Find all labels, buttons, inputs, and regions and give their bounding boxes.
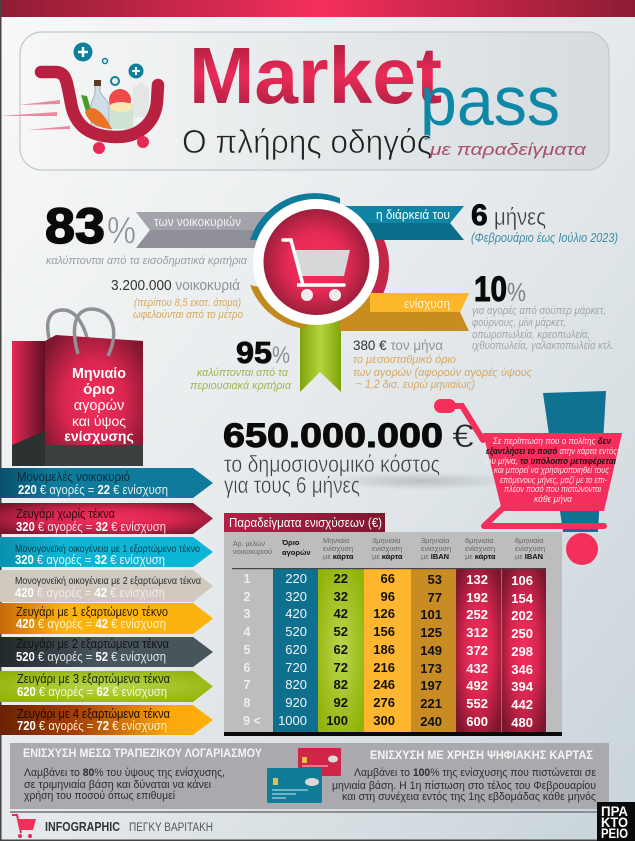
table header: ενίσχυση [465,544,495,553]
arrow: couple with 1 child: Ζευγάρι με 1 εξαρτώμενο τέκνο [16,605,168,619]
table header: 3μηνιαία [372,536,401,545]
table header: ενίσχυση [515,544,545,553]
column: 3-month card: 156 [373,624,395,639]
arrow: couple without children [0,503,213,534]
column: 6-month IBAN [511,573,534,730]
table header: ενίσχυση [323,544,353,553]
footer credit [12,815,213,838]
banner: grey households: των νοικοκυριών [154,215,241,229]
table header: ενίσχυση [372,544,402,553]
arrow: couple without children: 320 € αγορές = 32 € ενίσχυση [16,520,166,534]
arrow: single parent with 2 children: Μονογονεϊκή οικογένεια με 2 εξαρτώμενα τέκνα [15,575,201,587]
table header: ενίσχυση [421,544,451,553]
arrow: couple with 1 child: 420 € αγορές = 42 € ενίσχυση [16,617,166,631]
column: members: 5 [244,643,251,657]
stat: households benefiting: (περίπου 8,5 εκατ. άτομα) [134,297,241,309]
column: 6-month card: 132 [466,572,488,587]
column: 3-month card: 186 [373,642,395,657]
icon: cart [283,240,350,301]
budget cost [223,417,515,498]
stat: 10 percent: ιχθυοπωλεία, γαλακτοπωλεία κτλ. [472,340,614,352]
arrow: couple with 3 children [0,671,213,702]
column: 3-month IBAN: 53 [428,572,442,587]
column: purchase limit: 320 [285,589,307,604]
column: 6-month card: 372 [466,643,488,658]
bag label: όριο [83,381,115,398]
subtitle: Ο πλήρης οδηγός [182,123,432,160]
household arrows [0,468,213,735]
column: purchase limit: 520 [285,624,307,639]
arrow: couple with 3 children: Ζευγάρι με 3 εξαρτώμενα τέκνα [17,672,170,686]
icon: bank cards [267,748,341,803]
column: 3-month IBAN: 240 [420,714,442,729]
stat: 6 months: μήνες [494,204,546,231]
bag label: και ύψος [72,413,126,429]
stat: 83 percent: 83 [45,198,105,254]
bag label: αγορών [74,398,124,414]
table header: Μηνιαία [323,536,350,545]
ribbon: green [300,318,341,392]
heading: pass: pass [420,62,560,140]
shopping bag [12,309,143,466]
table header: 3μηνιαία [421,536,450,545]
table title: Παραδείγματα ενισχύσεων (€) [229,515,382,530]
arrow: couple with 2 children: Ζευγάρι με 2 εξαρτώμενα τέκνα [16,637,169,651]
column: members: 1 [244,572,251,586]
logo: Praktoreio: ΚΤΟ [601,815,628,830]
arc: teal [250,193,340,240]
callout text: Σε περίπτωση που ο πολίτης δεν [492,436,611,446]
stat: 380 euros: των αγορών (αφορούν αγορές ύψους [353,367,532,379]
table header: με ΙΒΑΝ [421,552,449,561]
stat: 380 euros [353,337,532,391]
stat: 83 percent [45,198,285,267]
table header: Αρ. μελών [233,539,265,548]
arrow: single parent with 1 child: 320 € αγορές = 32 € ενίσχυση [15,553,165,567]
column: purchase limit: 220 [285,571,307,586]
column: 3-month IBAN: 197 [420,678,442,693]
column: purchase limit: 420 [285,606,307,621]
arrow: couple with 3 children: 620 € αγορές = 62 € ενίσχυση [17,685,167,699]
column: members: 6 [244,661,251,675]
arrow: couple with 4 children [0,705,213,735]
column: monthly card [326,571,348,728]
stat: households benefiting: 3.200.000 νοικοκυριά [111,278,240,294]
column: 6-month IBAN: 346 [511,662,533,677]
logo: Praktoreio [597,802,635,841]
stat: 83 percent: % [107,210,136,252]
budget cost: € [452,418,474,454]
stat: 10 percent: φούρνους, μίνι μάρκετ, [472,317,566,329]
column: monthly card: 100 [326,713,348,728]
column: members: 4 [244,625,251,639]
icon: shopping cart with groceries [0,42,158,154]
central circle emblem with ribbons [250,193,469,392]
column: 6-month card [466,572,488,729]
stat: 6 months [471,199,618,245]
column: 6-month IBAN: 202 [511,608,533,623]
budget cost: 650.000.000 [223,417,443,455]
callout text [484,436,618,504]
column: purchase limit: 920 [285,695,307,710]
column: 6-month IBAN: 250 [511,626,533,641]
arrow: couple with 1 child [0,603,213,634]
column: monthly card: 42 [334,606,348,621]
stat: 380 euros: ~ 1,2 δισ. ευρώ μηνιαίως) [356,379,475,391]
digital card text: Λαμβάνει το 100% της ενίσχυσης που πιστώνεται σε [354,767,596,779]
callout text: και μπορεί να χρησιμοποιηθεί τους [494,465,610,475]
column: 6-month IBAN: 154 [511,591,534,606]
bag label: ενίσχυσης [64,428,134,444]
column: 6-month IBAN: 298 [511,644,533,659]
title panel [0,31,609,170]
stat: 83 percent: καλύπτονται από τα εισοδηματικά κριτήρια [46,255,247,267]
digital card text [332,750,596,803]
arrow: single parent with 1 child: Μονογονεϊκή οικογένεια με 1 εξαρτώμενο τέκνο [15,543,200,555]
column: 3-month IBAN: 149 [420,643,442,658]
column: 3-month card: 96 [381,589,395,604]
arc: red right [340,240,389,296]
table header: νοικοκυριού [233,547,272,556]
digital card text: μηνιαία βάση. Η 1η πίστωση στο τέλος του Φεβρουαρίου [332,780,596,792]
bank transfer text [23,748,262,802]
arc: gold [250,285,320,329]
stat: 10 percent: % [507,277,526,307]
arrow: couple with 2 children: 520 € αγορές = 52 € ενίσχυση [16,650,166,664]
digital card text: και στη συνέχεια εντός της 1ης εβδομάδας κάθε μηνός [342,791,596,803]
column: monthly card: 72 [334,660,348,675]
column: purchase limit: 720 [285,660,307,675]
table header: αγορών [282,548,311,557]
column: 6-month card: 600 [466,714,488,729]
stat: 10 percent: οπωροπωλεία, κρεοπωλεία, [472,329,590,341]
digital card text: ΕΝΙΣΧΥΣΗ ΜΕ ΧΡΗΣΗ ΨΗΦΙΑΚΗΣ ΚΑΡΤΑΣ [370,750,593,762]
column: 3-month card: 276 [373,695,395,710]
bag label: Μηνιαίο [72,365,126,382]
bank transfer text: χρήση του ποσού όπως επιθυμεί [24,790,176,802]
footer credit: INFOGRAPHIC [45,819,121,834]
callout text: εξαντλήσει το ποσό στην κάρτα εντός [486,446,618,456]
exclamation mark [543,391,606,565]
subtitle accent: με παραδείγματα [429,140,588,159]
table: examples of support [224,513,562,736]
column: members [243,572,261,728]
column: 6-month card: 192 [466,590,488,605]
banner: gold support: ενίσχυση [404,297,450,311]
table header: με ΙΒΑΝ [515,552,543,561]
column: 6-month IBAN: 394 [511,679,534,694]
logo: Praktoreio: ΡΕΙΟ [601,826,628,841]
column: 6-month card: 312 [466,625,488,640]
arrow: couple with 4 children: 720 € αγορές = 72 € ενίσχυση [17,719,167,733]
stat: households benefiting [111,278,243,321]
stat: 95 percent: 95 [236,335,272,370]
callout text: του μήνα, το υπόλοιπο μεταφέρεται [484,456,616,466]
banner: gold support [340,293,469,331]
column: monthly card: 92 [334,695,348,710]
red cart callout [434,399,622,526]
banner: teal duration [340,206,464,240]
column: 3-month card: 300 [373,713,395,728]
column: monthly card: 52 [334,624,348,639]
table header: 6μηνιαία [465,536,494,545]
arrow: couple with 2 children [0,637,213,667]
top bar [0,0,635,17]
column: members: 2 [244,590,251,604]
stat: 10 percent: για αγορές από σούπερ μάρκετ, [472,305,606,317]
banner: grey households [136,212,285,248]
column: purchase limit: 620 [285,642,307,657]
column: 6-month card: 432 [466,661,488,676]
column: 3-month IBAN: 173 [420,661,442,676]
column: 3-month IBAN [420,572,442,729]
stat: 95 percent: % [272,342,290,369]
column: monthly card: 22 [334,571,348,586]
stat: 10 percent: 10 [474,270,507,309]
column: 6-month IBAN: 106 [511,573,533,588]
table header: με κάρτα [465,552,496,561]
arrow: single-member household: 220 € αγορές = 22 € ενίσχυση [18,483,168,497]
bank transfer text: Λαμβάνει το 80% του ύψους της ενίσχυσης, [24,767,225,779]
icon: footer cart [12,815,36,838]
stat: 6 months: 6 [471,199,488,232]
column: monthly card: 62 [334,642,348,657]
column: monthly card: 82 [334,677,348,692]
arrow: couple without children: Ζευγάρι χωρίς τέκνα [16,507,115,521]
bag label [64,365,134,444]
column: 3-month card: 216 [373,660,395,675]
column: 6-month card: 492 [466,678,488,693]
column: 6-month card: 552 [466,696,488,711]
callout text: επόμενους μήνες, μαζί με το επι- [500,475,607,485]
logo: Praktoreio: ΠΡΑ [601,804,628,819]
stat: 95 percent: περιουσιακά κριτήρια [190,380,292,392]
stat: 380 euros: το μεσοσταθμικό όριο [353,354,457,366]
column: 3-month card [373,571,395,728]
budget cost: για τους 6 μήνες [224,472,360,498]
heading: Market: Market [189,31,442,120]
column: 3-month card: 126 [373,606,395,621]
bank transfer text: ΕΝΙΣΧΥΣΗ ΜΕΣΩ ΤΡΑΠΕΖΙΚΟΥ ΛΟΓΑΡΙΑΣΜΟΥ [23,748,262,760]
footer credit: ΠΕΓΚΥ ΒΑΡΙΤΑΚΗ [129,822,213,834]
bank transfer text: σε τριμηνιαία βάση και δύναται να κάνει [24,779,212,791]
column: 3-month card: 246 [373,677,395,692]
arrow: couple with 4 children: Ζευγάρι με 4 εξαρτώμενα τέκνα [17,707,170,721]
table header: με κάρτα [323,552,354,561]
table header [233,536,545,561]
column: purchase limit: 1000 [278,713,307,728]
table header: με κάρτα [372,552,403,561]
column: 6-month IBAN: 480 [511,715,533,730]
column: 3-month IBAN: 125 [420,625,442,640]
column: purchase limit [278,571,307,728]
arrow: single parent with 1 child [0,537,213,567]
arrow: single-member household: Μονομελές νοικοκυριό [17,470,130,484]
stat: 95 percent: καλύπτονται από τα [197,367,289,379]
column: 3-month IBAN: 221 [420,696,442,711]
banner: teal duration: η διάρκειά του [376,207,450,222]
arrow: single-member household [0,468,213,498]
arrow: single parent with 2 children [0,570,213,602]
stat: households benefiting: ωφελούνται από το μέτρο [133,309,243,321]
table header: 6μηνιαία [515,536,544,545]
column: 3-month card: 66 [381,571,395,586]
stat: 10 percent [472,270,614,352]
callout text: πλέον ποσό που πιστώνονται [504,484,601,494]
column: 6-month IBAN: 442 [511,697,533,712]
column: 6-month card: 252 [466,607,488,622]
column: members: 3 [244,607,251,621]
stat: 95 percent [190,335,292,392]
column: members: 8 [244,696,251,710]
arrow: single parent with 2 children: 420 € αγορές = 42 € ενίσχυση [15,586,165,600]
column: purchase limit: 820 [285,677,307,692]
column: 3-month IBAN: 101 [420,607,442,622]
column: members: 7 [244,678,251,692]
column: members: 9 < [243,714,261,728]
table header: Όριο [281,538,300,547]
column: monthly card: 32 [334,589,348,604]
bottom info panel [10,743,609,813]
column: 3-month IBAN: 77 [428,590,442,605]
budget cost: το δημοσιονομικό κόστος [224,451,440,477]
callout text: κάθε μήνα [534,494,573,504]
stat: 380 euros: 380 € τον μήνα [353,337,443,353]
